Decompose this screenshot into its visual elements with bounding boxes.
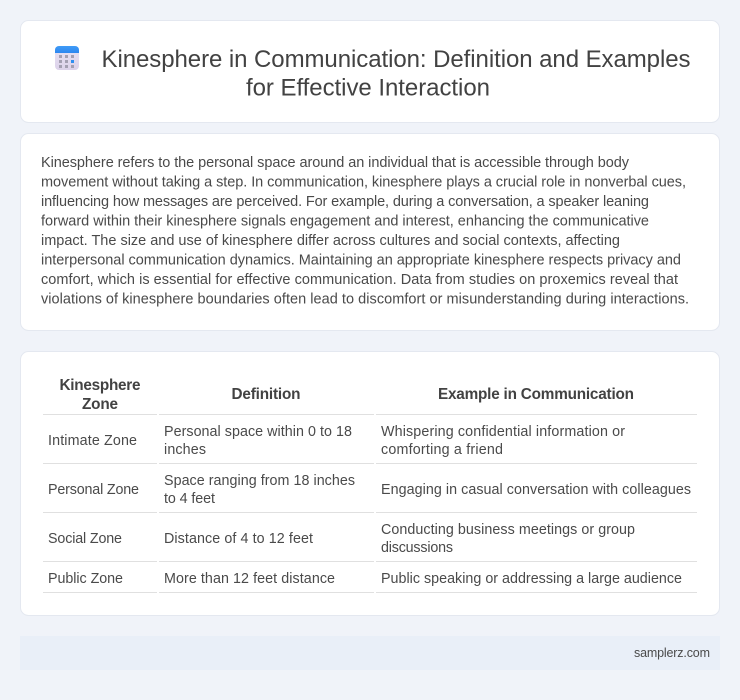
row: public zone: Public speaking or addressing a large audience bbox=[381, 571, 682, 587]
title: Kinesphere in Communication: Definition and Examples bbox=[102, 46, 690, 73]
text block: description: influencing how messages are perceived. For example, during a conversation, a speaker leaning bbox=[41, 194, 649, 210]
text block: description: movement without taking a step. In communication, kinesphere plays a crucial role in nonverbal cues, bbox=[41, 174, 686, 190]
row: personal zone bbox=[48, 473, 691, 507]
text block: description: forward within their kinesphere signals engagement and interest, enhancing the communicative bbox=[41, 214, 649, 230]
row: social zone bbox=[48, 522, 635, 556]
row: personal zone: Engaging in casual conversation with colleagues bbox=[381, 482, 691, 498]
row: personal zone: Space ranging from 18 inches bbox=[164, 473, 355, 489]
row: public zone: Public Zone bbox=[48, 571, 123, 587]
row: public zone bbox=[48, 571, 682, 587]
text block: description: impact. The size and use of kinesphere differ across cultures and social contexts, affecting bbox=[41, 233, 620, 249]
title: for Effective Interaction bbox=[246, 74, 490, 102]
text block: description bbox=[41, 155, 689, 308]
footer bar bbox=[20, 636, 720, 670]
row: personal zone: to 4 feet bbox=[164, 491, 215, 507]
row: intimate zone bbox=[48, 424, 625, 458]
table: kinesphere zones bbox=[43, 377, 697, 593]
row: intimate zone: Intimate Zone bbox=[48, 433, 137, 449]
row: public zone: More than 12 feet distance bbox=[164, 571, 335, 587]
title bbox=[102, 46, 690, 102]
text block: description: violations of kinesphere boundaries often lead to discomfort or misunderstanding during interactions. bbox=[41, 292, 689, 308]
table header bbox=[60, 377, 634, 413]
row: personal zone: Personal Zone bbox=[48, 482, 139, 498]
table rules bbox=[43, 414, 697, 593]
icon: calendar bbox=[55, 46, 79, 70]
table header: Zone bbox=[82, 396, 118, 413]
row: intimate zone: Whispering confidential information or bbox=[381, 424, 625, 440]
row: intimate zone: comforting a friend bbox=[381, 442, 503, 458]
row: intimate zone: inches bbox=[164, 442, 206, 458]
panel: table card bbox=[20, 352, 720, 616]
panel: title card bbox=[20, 20, 720, 122]
table header: Definition bbox=[232, 386, 300, 403]
table header: Example in Communication bbox=[438, 386, 634, 403]
text block: description: Kinesphere refers to the personal space around an individual that is accessible through body bbox=[41, 155, 630, 171]
text block: description: interpersonal communication dynamics. Maintaining an appropriate kinesphere respects privacy and bbox=[41, 252, 681, 268]
row: social zone: discussions bbox=[381, 540, 453, 556]
text block: description: comfort, which is essential for effective communication. Data from studies on proxemics reveal that bbox=[41, 272, 678, 288]
table header: Kinesphere bbox=[60, 377, 140, 394]
row: social zone: Social Zone bbox=[48, 531, 122, 547]
panel: description card bbox=[20, 134, 720, 330]
footer text: samplerz.com bbox=[634, 646, 710, 660]
row: social zone: Conducting business meetings or group bbox=[381, 522, 635, 538]
row: intimate zone: Personal space within 0 to 18 bbox=[164, 424, 352, 440]
row: social zone: Distance of 4 to 12 feet bbox=[164, 531, 313, 547]
